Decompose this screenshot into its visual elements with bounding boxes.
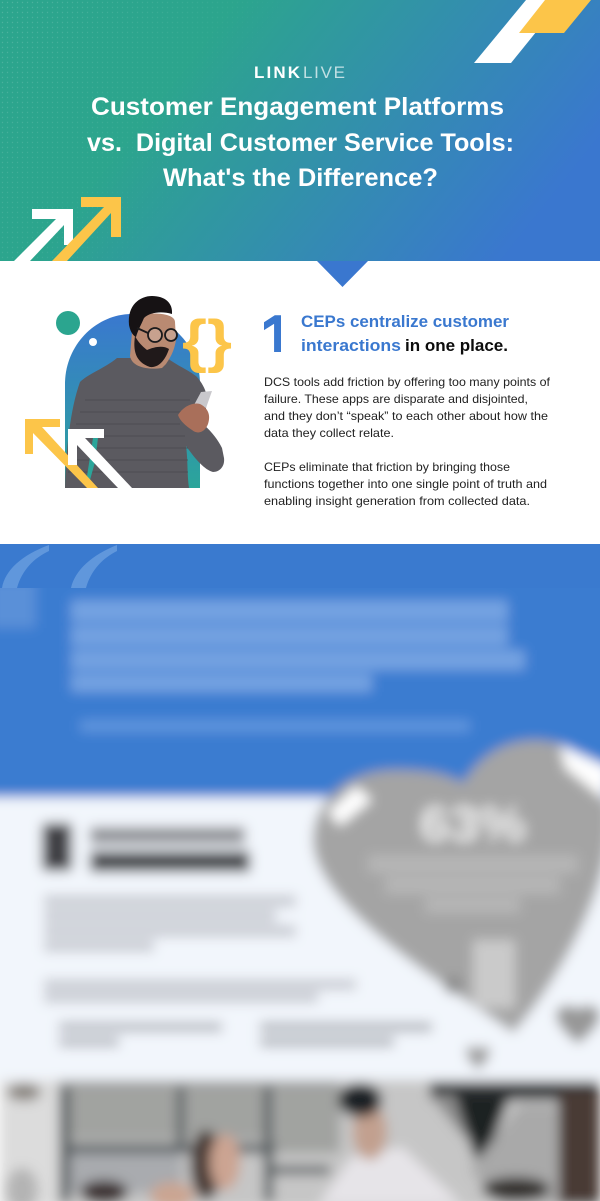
section 2 panel bbox=[0, 740, 600, 1082]
small heart right bbox=[556, 1005, 600, 1044]
header panel bbox=[0, 0, 600, 261]
small heart centre bbox=[466, 1046, 490, 1070]
foreground heads bbox=[80, 1180, 128, 1201]
notch pointer bbox=[317, 261, 368, 287]
right background bbox=[430, 1082, 600, 1201]
body text: paragraph 1 bbox=[264, 375, 551, 440]
title bbox=[87, 93, 514, 192]
quote marks bbox=[2, 545, 117, 588]
title: vs. Digital Customer Service Tools: bbox=[87, 129, 514, 157]
section heading: CEPs centralize customer bbox=[301, 312, 509, 331]
logo: LINK bbox=[254, 63, 301, 82]
blurred attribution bbox=[80, 720, 470, 732]
hand bbox=[178, 404, 209, 432]
hair bbox=[129, 296, 172, 337]
icon: top-right stripes bbox=[474, 0, 591, 63]
photo panel bbox=[0, 1080, 600, 1201]
blurred quote text bbox=[71, 600, 525, 692]
phone bbox=[194, 391, 212, 408]
body text: paragraph 2: enabling insight generation from collected data. bbox=[264, 494, 530, 508]
body text: paragraph 1: DCS tools add friction by offering too many points of bbox=[264, 375, 551, 389]
icon: rising arrows bbox=[14, 197, 121, 261]
section heading: in one place. bbox=[405, 336, 508, 355]
blurred bullet 2 bbox=[260, 1022, 432, 1047]
white arrow bbox=[68, 429, 132, 488]
body text: paragraph 2 bbox=[264, 460, 547, 508]
blurred stat text bbox=[368, 855, 578, 913]
sleeve gap bbox=[87, 438, 98, 480]
blurred bullet 1 bbox=[59, 1022, 222, 1047]
man figure bbox=[65, 296, 224, 488]
teal circle bbox=[56, 311, 80, 335]
body text: paragraph 2: functions together into one single point of truth and bbox=[264, 477, 547, 491]
quote panel: blurred body bbox=[0, 588, 600, 806]
body text: paragraph 1: data they collect relate. bbox=[264, 426, 394, 440]
title: What's the Difference? bbox=[163, 164, 438, 192]
stat value: 63% bbox=[420, 796, 526, 852]
blurred paragraph 1 bbox=[44, 895, 296, 952]
section heading: interactions bbox=[301, 336, 401, 355]
quote mark remnant bbox=[0, 580, 36, 628]
glasses bbox=[137, 328, 177, 342]
quote panel: sharp top bbox=[0, 544, 600, 604]
blurred heading bbox=[90, 827, 250, 872]
number 2 bbox=[42, 823, 72, 871]
window frames bbox=[60, 1082, 340, 1201]
beard bbox=[134, 336, 169, 367]
left column bbox=[0, 1080, 58, 1201]
heart highlight streaks bbox=[560, 745, 600, 800]
arch backdrop bbox=[65, 314, 200, 488]
light figure bbox=[473, 940, 515, 1008]
body text: paragraph 2: CEPs eliminate that friction by bringing those bbox=[264, 460, 510, 474]
stat heart bbox=[313, 740, 600, 1033]
section 1 panel bbox=[25, 261, 550, 508]
curly braces: {} bbox=[182, 309, 232, 374]
windows bbox=[70, 1088, 340, 1193]
woman bbox=[190, 1130, 240, 1200]
illustration: man with phone bbox=[25, 296, 232, 488]
neck and face bbox=[130, 314, 176, 369]
body text: paragraph 1: and they don’t “speak” to each other about how the bbox=[264, 409, 548, 423]
blurred paragraph 2 bbox=[44, 979, 356, 1003]
logo light part: LIVE bbox=[303, 63, 345, 82]
title: Customer Engagement Platforms bbox=[91, 93, 504, 121]
section heading bbox=[301, 312, 509, 355]
white dot bbox=[89, 338, 97, 346]
body text: paragraph 1: failure. These apps are disparate and disjointed, bbox=[264, 392, 528, 406]
yellow arrow bbox=[25, 419, 98, 488]
man in white shirt bbox=[318, 1083, 462, 1201]
number 1: 1 bbox=[259, 301, 296, 375]
blurred lower content bbox=[0, 520, 600, 1201]
